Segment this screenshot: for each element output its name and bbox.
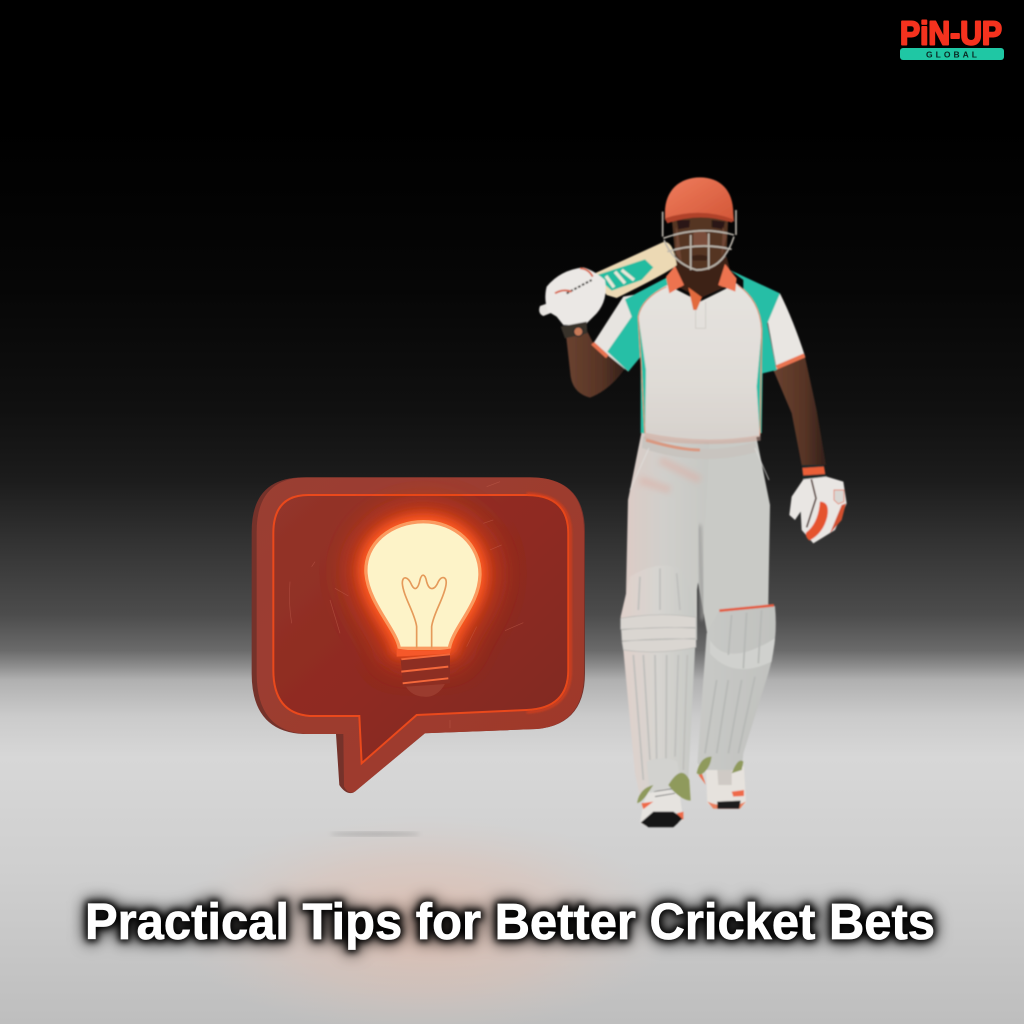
glove body (545, 267, 606, 325)
glove pad (806, 502, 828, 541)
right glove (789, 463, 847, 543)
scratches (289, 482, 523, 728)
face (672, 217, 728, 271)
bubble face (273, 495, 568, 763)
pink fold shading (640, 460, 700, 490)
bulb glow (366, 522, 480, 648)
bulb filament (402, 575, 446, 648)
knee roll (621, 615, 696, 652)
left shoe (640, 787, 683, 827)
right sleeve cuff (777, 355, 805, 367)
left leg (625, 430, 710, 640)
face highlights (693, 230, 708, 247)
pink lower shirt tint (639, 357, 661, 430)
placket (688, 287, 702, 310)
trouser piping (630, 448, 769, 490)
left pad (621, 566, 696, 803)
title inner shadow: Practical Tips for Better Cricket Bets (85, 893, 935, 950)
bulb glass (366, 522, 480, 648)
floor glow (175, 815, 675, 1024)
cricket player (539, 177, 847, 827)
bulb neck (397, 648, 452, 657)
right shoe (699, 767, 746, 809)
shirt sleeve left (593, 293, 642, 372)
helmet (665, 177, 734, 222)
left arm (566, 332, 625, 398)
collar (666, 264, 737, 293)
watch (561, 322, 587, 338)
bubble rim (257, 477, 584, 793)
helmet brim (665, 213, 733, 223)
trousers (625, 430, 770, 660)
raglan piping (638, 285, 762, 435)
bulb base (401, 654, 450, 697)
neck (672, 257, 733, 298)
bulb halo (366, 522, 480, 648)
glove strap (567, 280, 592, 293)
sleeve teal panel (607, 275, 672, 433)
left sleeve cuff (593, 343, 607, 357)
speech bubble with light bulb (252, 477, 585, 793)
glove red accent (555, 268, 593, 293)
pad ribs (633, 568, 687, 780)
leg guards and shoes (621, 566, 776, 827)
shirt bottom shade (644, 433, 761, 444)
head (663, 177, 736, 271)
right sleeve (767, 293, 805, 369)
logo wordmark: PiN-UP (900, 14, 1002, 52)
bubble floor shadow (330, 832, 420, 836)
bat (593, 242, 677, 298)
wristband (802, 463, 827, 479)
glove stripes (807, 479, 816, 527)
face grille (663, 210, 736, 270)
right pad (697, 605, 776, 775)
glove body (789, 477, 847, 543)
right teal panel (730, 270, 780, 433)
logo subtitle: GLOBAL (926, 50, 980, 60)
grass (637, 773, 691, 803)
right arm (773, 357, 826, 465)
bubble side depth (252, 477, 585, 793)
logo: Pin-Up Global (900, 14, 1004, 60)
waist tint (646, 440, 700, 450)
title outer shadow: Practical Tips for Better Cricket Bets (85, 893, 935, 950)
bat handle (539, 301, 558, 316)
title: Practical Tips for Better Cricket Bets (85, 893, 935, 950)
shirt and head group (539, 177, 826, 465)
inseam shadow (699, 525, 703, 620)
logo badge (900, 48, 1004, 60)
right leg (694, 430, 770, 660)
inner rim highlight (527, 493, 571, 712)
left glove (539, 267, 606, 338)
shirt body (638, 283, 762, 441)
bat sticker (595, 259, 653, 291)
waistband (642, 436, 757, 459)
